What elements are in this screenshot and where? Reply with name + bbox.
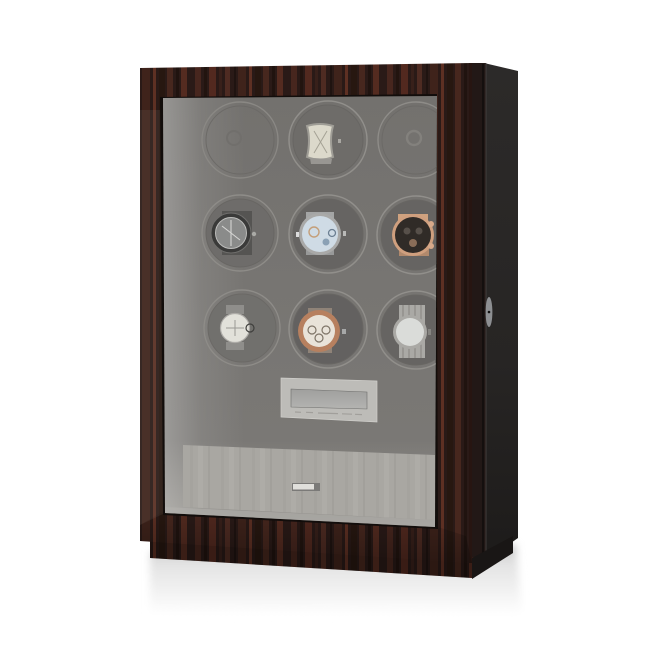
slot row 3 right, steel watch bbox=[376, 290, 436, 370]
winder slots and watches bbox=[202, 101, 455, 369]
slot row 1 centre, tonneau watch bbox=[289, 101, 367, 179]
bottom rail bbox=[140, 512, 472, 563]
slot row 2 right, rose gold watch bbox=[376, 195, 436, 275]
right frame edge bbox=[469, 63, 472, 563]
slot row 3 left, white dial watch bbox=[204, 290, 280, 366]
slot row 2 left, black diver watch bbox=[202, 195, 278, 271]
slot row 1 right, empty bbox=[377, 101, 437, 179]
lower door reflection strip bbox=[165, 507, 435, 527]
plinth base bbox=[150, 536, 513, 579]
left frame muted reflection bbox=[140, 110, 165, 525]
glass door bbox=[160, 94, 438, 529]
product photo: nine-slot watch winder cabinet bbox=[140, 63, 520, 600]
drawer front bbox=[183, 445, 435, 520]
slot row 2 centre, blue dial watch bbox=[289, 195, 367, 273]
LCD screen bbox=[291, 389, 367, 409]
wood frame bbox=[140, 63, 472, 563]
drawer handle bbox=[292, 483, 320, 491]
cabinet side panel bbox=[472, 63, 518, 564]
control display panel bbox=[281, 378, 377, 422]
button row bbox=[295, 412, 362, 415]
floor shadow bbox=[150, 545, 522, 615]
slot row 3 centre, rose chronograph watch bbox=[289, 290, 367, 368]
slot row 1 left, empty bbox=[202, 102, 278, 178]
side lock bbox=[486, 297, 492, 327]
